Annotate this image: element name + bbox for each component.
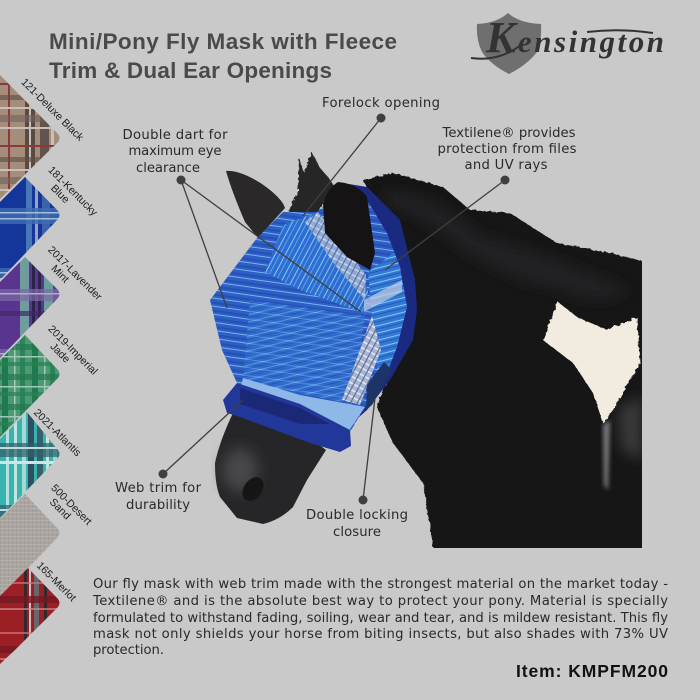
right ear — [323, 182, 375, 270]
callout: double locking closure — [306, 398, 408, 540]
mask panel: cheek — [368, 252, 407, 371]
item number: Item: KMPFM200 — [516, 661, 668, 681]
grey patch — [618, 395, 642, 460]
mask panel: white top — [305, 212, 366, 300]
label: 500-Desert Sand: 500-Desert — [48, 482, 94, 528]
label: 121-Deluxe Black: 121-Deluxe Black — [19, 76, 86, 144]
swatch: 181-Kentucky Blue — [0, 177, 60, 280]
callout: Textilene: and UV rays — [464, 158, 548, 173]
mask panel: forehead — [265, 212, 368, 314]
description paragraph: formulated to withstand fading, soiling, wear and tear, and is mildew resistant. This fly — [93, 611, 668, 626]
left ear — [226, 171, 285, 238]
mask panel: band stripes — [364, 280, 402, 312]
label: 181-Kentucky Blue: Blue — [48, 182, 72, 206]
mask fleece trim at neck — [343, 183, 417, 425]
title — [49, 29, 397, 83]
description paragraph: mask not only shields your horse from biting insects, but also shades with 73% UV — [93, 627, 668, 642]
muzzle — [215, 412, 326, 524]
callout: double locking closure: Double locking — [306, 508, 408, 523]
pony photo — [210, 152, 650, 552]
muzzle highlight — [222, 448, 258, 492]
callout: double locking closure: closure — [333, 525, 381, 540]
callout: web trim: durability — [126, 498, 190, 513]
label: 2017-Lavender Mint: Mint — [49, 263, 71, 285]
mask closure — [366, 362, 392, 410]
title: Mini/Pony Fly Mask with Fleece — [49, 29, 397, 54]
swatch: 2021-Atlantis — [0, 412, 60, 518]
mask panel: lower band — [240, 378, 365, 432]
description paragraph: protection. — [93, 643, 164, 658]
colour swatches — [0, 75, 60, 664]
callout: web trim: Web trim for — [115, 481, 202, 496]
swatch: 121-Deluxe Black — [0, 75, 60, 199]
swatch: 500-Desert Sand — [0, 494, 60, 597]
callout: Textilene: Textilene® provides — [442, 126, 576, 141]
callout: Textilene — [385, 126, 577, 270]
label: 500-Desert Sand: Sand — [47, 496, 73, 522]
label: 165-Merlot: 165-Merlot — [34, 560, 78, 604]
mask panel: nose side — [243, 300, 365, 405]
callout: double dart: Double dart for — [122, 128, 228, 143]
label: 2019-Imperial Jade: Jade — [48, 341, 72, 366]
callout: double dart: maximum eye — [128, 144, 222, 159]
callout: web trim — [115, 400, 243, 513]
swatch labels — [19, 76, 104, 604]
label: 2021-Atlantis: 2021-Atlantis — [31, 407, 83, 459]
swatch: 2019-Imperial Jade — [0, 335, 60, 437]
pony neck and body — [363, 173, 650, 552]
callout: double dart: clearance — [136, 161, 200, 176]
description paragraph — [92, 577, 668, 658]
white streak — [603, 420, 610, 490]
nostril — [238, 473, 268, 505]
label: 2017-Lavender Mint: 2017-Lavender — [45, 244, 104, 303]
swatch: 2017-Lavender Mint — [0, 257, 60, 358]
noseband shadow — [240, 388, 330, 424]
callout: Textilene: protection from files — [438, 142, 577, 157]
description paragraph: Textilene® and is the absolute best way to protect your pony. Material is specially — [92, 594, 668, 609]
logo: Kensington: Kensington — [485, 13, 664, 62]
title: Trim & Dual Ear Openings — [49, 58, 332, 83]
label: 2019-Imperial Jade: 2019-Imperial — [45, 323, 100, 377]
fly mask — [210, 183, 417, 452]
forelock — [284, 152, 334, 240]
white heart patch — [543, 302, 640, 423]
callout: forelock opening: Forelock opening — [322, 96, 440, 111]
mask panel: white seam — [342, 316, 381, 405]
description paragraph: Our fly mask with web trim made with the strongest material on the market today - — [93, 577, 668, 592]
callout: forelock opening — [303, 96, 440, 216]
mask fleece noseband — [223, 383, 351, 452]
callout: double dart — [122, 128, 361, 312]
mask fabric — [210, 190, 407, 432]
label: 181-Kentucky Blue: 181-Kentucky — [45, 164, 100, 219]
swatch: 165-Merlot — [0, 568, 60, 664]
mane sheen — [390, 194, 617, 298]
